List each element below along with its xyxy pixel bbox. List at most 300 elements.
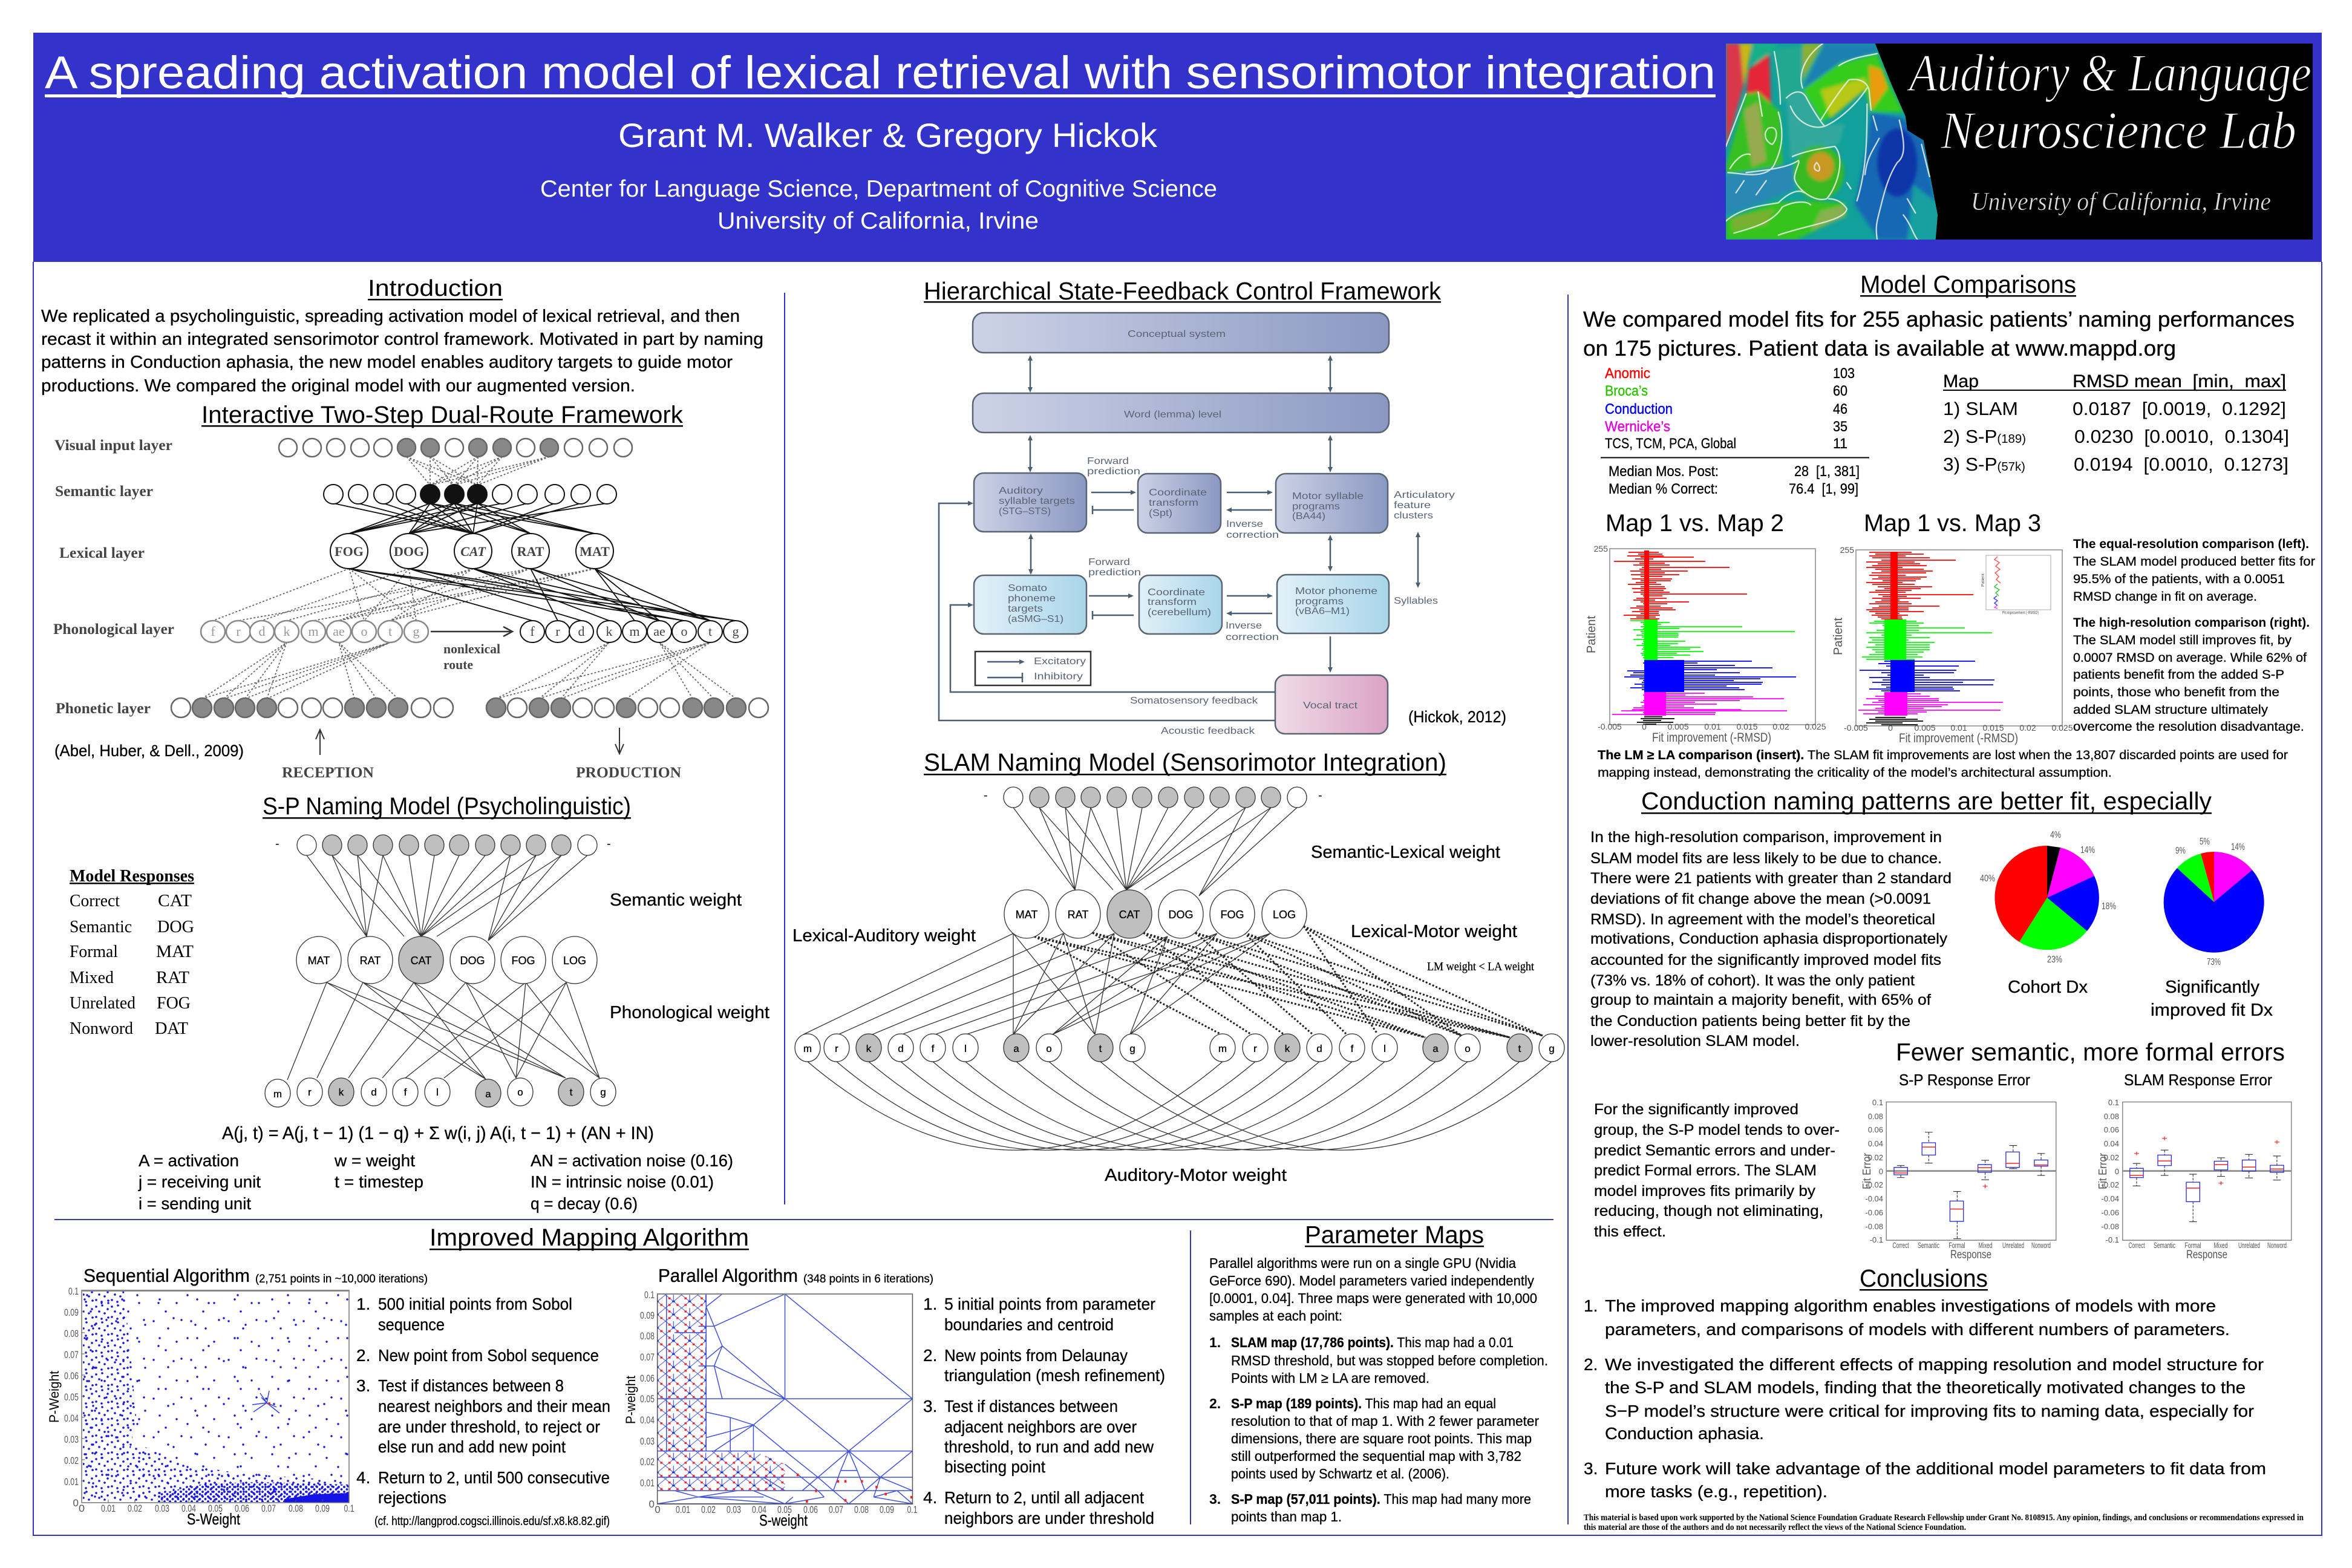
scatter plot: sequential map: 0.05 (64, 1391, 79, 1403)
table: model responses: RAT (156, 969, 189, 987)
box plot: S-P response error: Semantic (1918, 1241, 1939, 1250)
bar chart: map 1 vs map 3: 255 (1840, 545, 1854, 555)
label: semantic weight: Semantic weight (610, 890, 742, 910)
scatter plot: sequential map: 0.08 (289, 1503, 303, 1514)
conclusions list: The improved mapping algorithm enables investigations of models with more (1605, 1296, 2216, 1315)
conduction text: In the high-resolution comparison, improvement in (1590, 829, 1942, 846)
diagram: state-feedback boxes: Motor phoneme (1295, 586, 1377, 596)
subheading: sequential algorithm: Sequential Algorithm (83, 1265, 250, 1286)
equation legend: i = sending unit (139, 1194, 251, 1213)
box plot: SLAM response error: 0.1 (2108, 1098, 2119, 1107)
bar chart: map 1 vs map 3: -0.005 (1844, 723, 1868, 733)
table: model responses: DOG (157, 918, 194, 936)
parallel algorithm steps: triangulation (mesh refinement) (944, 1366, 1165, 1385)
bar chart: map 1 vs map 3: 0.025 (2051, 723, 2073, 733)
mesh plot: parallel map: 0.08 (854, 1504, 869, 1515)
conclusions list: more tasks (e.g., repetition). (1605, 1482, 1828, 1501)
pie chart: significantly improved fit Dx: improved fit Dx (2151, 1001, 2273, 1020)
diagram: state-feedback boxes: correction (1226, 530, 1279, 540)
pie chart: significantly improved fit Dx (2151, 837, 2273, 1020)
comparison notes: The SLAM model produced better fits for (2073, 555, 2315, 569)
conclusions list: the S-P and SLAM models, finding that the theoretically motivated changes to the (1605, 1378, 2246, 1397)
diagram: S-P network: DOG (460, 955, 485, 967)
diagram: S-P network: l (436, 1086, 439, 1098)
diagram: SLAM network: m (803, 1043, 812, 1054)
diagram: SLAM network: k (866, 1043, 872, 1054)
sequential algorithm steps (356, 1295, 610, 1528)
heading: improved mapping algorithm: Improved Mapping Algorithm (430, 1224, 749, 1251)
parameter maps list: resolution to that of map 1. With 2 fewer parameter (1231, 1413, 1539, 1429)
diagram: state-feedback boxes: Inverse (1226, 621, 1262, 631)
diagram: dual-route network: ae (333, 624, 345, 639)
mesh plot: parallel map: 0.02 (640, 1456, 655, 1468)
table: map RMSD: 0.0230 [0.0010, 0.1304] (2074, 426, 2289, 447)
layer labels: Semantic layer (55, 483, 153, 500)
diagram: SLAM network: m (1218, 1043, 1227, 1054)
parallel algorithm steps: threshold, to run and add new (944, 1437, 1154, 1456)
parallel algorithm steps: neighbors are under threshold (944, 1509, 1154, 1527)
diagram: dual-route network: MAT (580, 544, 610, 559)
layer labels: Phonetic layer (56, 701, 151, 717)
box plot: S-P response error: Nonword (2031, 1241, 2051, 1250)
bar chart: map 1 vs map 2: 0.025 (1805, 722, 1826, 731)
equation legend: q = decay (0.6) (531, 1194, 638, 1213)
pie chart: significantly improved fit Dx: Significantly (2165, 978, 2259, 997)
diagram: dual-route network: k (283, 624, 290, 639)
parameter maps list: SLAM map (17,786 points). This map had a 0.01 (1231, 1334, 1514, 1350)
diagram: S-P network (265, 835, 616, 1107)
diagram: state-feedback boxes: (cerebellum) (1148, 607, 1211, 618)
response error text (1594, 1101, 1840, 1240)
parameter maps list: 1. (1209, 1334, 1221, 1350)
box plot: S-P response error: 0.08 (1868, 1112, 1883, 1121)
mesh plot: parallel map: 0.04 (640, 1414, 655, 1426)
parallel algorithm steps: New points from Delaunay (944, 1346, 1128, 1365)
scatter plot: sequential map: P-Weight (47, 1371, 62, 1423)
scatter plot: sequential map: 0.07 (64, 1349, 79, 1361)
diagram: SLAM network: r (1253, 1043, 1257, 1054)
diagram: state-feedback boxes: syllable targets (999, 496, 1075, 506)
panel: introduction (41, 276, 763, 396)
diagram: state-feedback boxes: Vocal tract (1303, 701, 1358, 711)
box plot: S-P response error: 0.02 (1868, 1153, 1883, 1162)
box plot: SLAM response error: -0.04 (2101, 1194, 2119, 1203)
diagram: state-feedback boxes: Word (lemma) level (1124, 410, 1221, 420)
bar chart: map 1 vs map 3: 0.02 (2019, 723, 2036, 733)
model comparison intro: We compared model fits for 255 aphasic patients’ naming performances (1583, 307, 2295, 332)
layer labels (53, 437, 174, 717)
mesh plot: parallel map: 0.1 (907, 1504, 917, 1515)
bar chart: map 1 vs map 2: 255 (1594, 544, 1608, 554)
diagram: dual-route network: o (681, 624, 687, 639)
bar chart: map 1 vs map 3: Patient (1832, 618, 1845, 655)
layer labels: Lexical layer (59, 545, 145, 561)
mesh plot: parallel map: 0 (649, 1498, 655, 1510)
mesh plot: parallel map: 0.08 (640, 1330, 655, 1342)
arrow: reception (316, 730, 324, 755)
table: patient cohort: 103 (1833, 365, 1855, 382)
diagram: dual-route network: d (259, 624, 265, 639)
mesh plot: parallel map: 0.07 (829, 1504, 843, 1515)
diagram: S-P network: RAT (360, 955, 381, 967)
sequential algorithm steps: 1. (356, 1295, 370, 1313)
table: patient cohort: 11 (1833, 436, 1847, 452)
table: map RMSD: 1) SLAM (1943, 398, 2018, 419)
parallel algorithm steps: 2. (923, 1346, 937, 1365)
lab logo: University of California, Irvine (1971, 188, 2271, 216)
diagram: SLAM network: t (1518, 1043, 1521, 1054)
sequential algorithm steps: else run and add new point (378, 1437, 566, 1456)
scatter plot: sequential map: 0.09 (315, 1503, 330, 1514)
diagram: SLAM network: o (1046, 1043, 1052, 1054)
box plot: S-P response error: -0.02 (1865, 1180, 1883, 1189)
box plot: SLAM response error: Semantic (2154, 1241, 2175, 1250)
equation legend: IN = intrinsic noise (0.01) (531, 1172, 714, 1191)
scatter plot: sequential map: 0.1 (344, 1503, 354, 1514)
box plot: SLAM response error: Response (2186, 1249, 2227, 1261)
pie chart: cohort Dx: Cohort Dx (2008, 978, 2088, 997)
bar chart: map 1 vs map 3: Fit improvement (-RMSD) (1899, 731, 2018, 745)
conduction text: deviations of fit change above the mean (>0.0091 (1590, 890, 1931, 907)
label: nonlexical route: route (443, 657, 473, 672)
equation legend: w = weight (334, 1151, 415, 1170)
comparison notes: The equal-resolution comparison (left). (2073, 537, 2309, 551)
introduction text: recast it within an integrated sensorimotor control framework. Motivated in part by naming (41, 330, 763, 349)
table: patient cohort: 28 [1, 381] (1794, 463, 1860, 480)
bar chart: map 1 vs map 3: 0.01 (1950, 723, 1967, 733)
parameter maps list: dimensions, there are square root points. This map (1231, 1431, 1532, 1446)
scatter plot: sequential map: 0.09 (64, 1307, 79, 1318)
diagram: S-P network: - (607, 837, 611, 851)
box plot: SLAM response error: Correct (2128, 1241, 2145, 1250)
scatter plot: sequential map: 0.02 (64, 1455, 79, 1466)
scatter plot: sequential map: 0.05 (208, 1503, 223, 1514)
box plot: S-P response error: Correct (1892, 1241, 1909, 1250)
panel: interactive two-step dual-route framework (53, 402, 768, 781)
citation: (Hickok, 2012) (1408, 708, 1506, 726)
table: patient cohort: Median % Correct: (1609, 481, 1718, 497)
diagram: dual-route network: f (530, 624, 535, 639)
subheading: map 1 vs map 2: Map 1 vs. Map 2 (1606, 510, 1784, 537)
diagram: state-feedback boxes: prediction (1087, 466, 1140, 477)
diagram: state-feedback boxes: Somatosensory feedback (1130, 696, 1258, 706)
parameter maps list: RMSD threshold, but was stopped before completion. (1231, 1353, 1548, 1368)
diagram: state-feedback boxes: Forward (1088, 557, 1130, 567)
table: patient cohort (1601, 365, 1869, 497)
heading: conclusions: Conclusions (1860, 1264, 1988, 1292)
model comparison intro (1583, 307, 2295, 361)
mesh plot: parallel map: 0.09 (640, 1310, 655, 1321)
mesh plot: parallel map: 0.03 (727, 1504, 741, 1515)
diagram: SLAM network: g (1129, 1043, 1135, 1054)
conduction text: motivations, Conduction aphasia disproportionately (1590, 930, 1948, 947)
parallel algorithm steps (923, 1295, 1165, 1527)
parallel algorithm steps: Test if distances between (944, 1397, 1118, 1416)
diagram: dual-route network: t (708, 624, 712, 639)
diagram: SLAM network: t (1099, 1043, 1102, 1054)
sequential algorithm steps: 3. (356, 1376, 370, 1395)
table: patient cohort: 60 (1833, 383, 1847, 399)
diagram: S-P network: CAT (411, 955, 431, 967)
subheading: SLAM response error: SLAM Response Error (2124, 1071, 2272, 1089)
diagram: S-P network: - (275, 837, 279, 851)
equation legend: t = timestep (335, 1172, 423, 1191)
response error text: For the significantly improved (1594, 1101, 1798, 1118)
authors: Grant M. Walker & Gregory Hickok (618, 116, 1158, 154)
conclusions list (1584, 1296, 2266, 1501)
conclusions list: 1. (1584, 1296, 1598, 1315)
scatter plot: sequential map: 0.01 (64, 1476, 79, 1488)
box plot: S-P response error: 0.04 (1868, 1139, 1883, 1148)
comparison notes (2073, 537, 2315, 734)
parameter maps intro: GeForce 690). Model parameters varied independently (1209, 1273, 1534, 1289)
box plot: S-P response error: Fit Error (1861, 1153, 1873, 1189)
mesh plot: parallel map: P-weight (623, 1376, 638, 1424)
citation: (Abel, Huber, & Dell., 2009) (54, 742, 244, 760)
table: map RMSD: 0.0194 [0.0010, 0.1273] (2074, 454, 2288, 475)
diagram: SLAM network: d (1316, 1043, 1322, 1054)
sequential algorithm steps: rejections (378, 1488, 446, 1507)
sequential algorithm steps: sequence (378, 1315, 445, 1334)
panel: conclusions (1584, 1264, 2304, 1532)
sequential algorithm steps: Return to 2, until 500 consecutive (378, 1468, 610, 1487)
table: map RMSD (1943, 371, 2289, 475)
heading: conduction naming patterns: Conduction naming patterns are better fit, especially (1641, 787, 2212, 815)
subheading: sequential algorithm (83, 1265, 428, 1286)
funding note: this material are those of the authors and do not necessarily reflect the views of the National Science Foundation. (1584, 1523, 1966, 1532)
panel: S-P naming model (70, 793, 769, 1213)
conclusions list: Future work will take advantage of the additional model parameters to fit data from (1605, 1459, 2266, 1478)
table: patient cohort: 35 (1833, 419, 1847, 435)
bar chart: map 1 vs map 3: 0 (1888, 723, 1893, 733)
box plot: S-P response error: Response (1950, 1249, 1991, 1261)
table: model responses (70, 867, 194, 1038)
bar chart: map 1 vs map 2: Fit improvement (-RMSD) (1652, 731, 1771, 745)
sequential algorithm steps: (cf. http://langprod.cogsci.illinois.edu/sf.x8.k8.82.gif) (374, 1515, 610, 1528)
diagram: S-P network: k (339, 1086, 344, 1098)
bar chart: map 1 vs map 3: 0.015 (1982, 723, 2004, 733)
diagram: state-feedback boxes: Inverse (1226, 519, 1263, 529)
table: map RMSD: 3) S-P(57k) (1943, 454, 2025, 475)
response error text: group, the S-P model tends to over- (1594, 1122, 1840, 1138)
diagram: S-P network: o (517, 1086, 523, 1098)
layer labels: Visual input layer (54, 437, 172, 454)
introduction text: patterns in Conduction aphasia, the new model enables auditory targets to guide motor (41, 353, 733, 372)
parallel algorithm steps: adjacent neighbors are over (944, 1417, 1137, 1436)
panel: SLAM naming model (792, 748, 1564, 1185)
equation legend: j = receiving unit (138, 1172, 261, 1191)
box plot: SLAM response error: 0.04 (2104, 1139, 2119, 1148)
table: model responses: CAT (158, 892, 192, 910)
introduction text (41, 307, 763, 396)
box plot: S-P response error: 0 (1879, 1167, 1883, 1176)
lab logo (1726, 44, 2313, 240)
diagram: SLAM network: RAT (1068, 909, 1088, 921)
parameter maps list: S-P map (57,011 points). This map had many more (1231, 1491, 1531, 1507)
panel: improved mapping algorithm (47, 1224, 1165, 1529)
conclusions list: 2. (1584, 1355, 1598, 1374)
box plot: SLAM response error: -0.08 (2101, 1222, 2119, 1231)
conduction text: SLAM model fits are less likely to be due to chance. (1590, 850, 1942, 867)
heading: SLAM naming model: SLAM Naming Model (Sensorimotor Integration) (924, 748, 1446, 776)
bar chart: map 1 vs map 2: 0 (1642, 722, 1647, 731)
box plot: SLAM response error: Formal (2185, 1241, 2201, 1250)
diagram: state-feedback boxes: (aSMG–S1) (1008, 614, 1063, 624)
diagram: SLAM network: a (1013, 1043, 1019, 1054)
diagram: state-feedback boxes: Somato (1008, 583, 1047, 593)
response error text: predict Formal errors. The SLAM (1594, 1162, 1817, 1179)
diagram: state-feedback boxes: correction (1226, 632, 1279, 642)
pie chart: cohort Dx: 23% (2047, 955, 2062, 965)
box plot: SLAM response error: 0.02 (2104, 1153, 2119, 1162)
scatter plot: sequential map: 0.04 (64, 1413, 79, 1424)
equation legend: A = activation (139, 1151, 239, 1170)
comparison caption: mapping instead, demonstrating the criticality of the model’s architectural assumption. (1598, 766, 2112, 780)
model comparison intro: on 175 pictures. Patient data is available at www.mappd.org (1583, 336, 2176, 361)
heading: parameter maps: Parameter Maps (1305, 1221, 1484, 1249)
labels: reception and production: RECEPTION (282, 765, 374, 781)
sequential algorithm steps: are under threshold, to reject or (378, 1417, 600, 1436)
diagram: dual-route network: m (308, 624, 319, 639)
title: A spreading activation model of lexical retrieval with sensorimotor integration (45, 47, 1716, 99)
introduction text: We replicated a psycholinguistic, spreading activation model of lexical retrieval, and then (41, 307, 740, 326)
diagram: state-feedback boxes: phoneme (1008, 593, 1056, 604)
diagram: state-feedback boxes: Motor syllable (1292, 491, 1364, 501)
pie chart: cohort Dx (1980, 830, 2116, 997)
conclusions list: parameters, and comparisons of models with different numbers of parameters. (1605, 1320, 2230, 1339)
parameter maps list: points used by Schwartz et al. (2006). (1231, 1466, 1449, 1481)
diagram: S-P network: g (600, 1086, 606, 1098)
panel: parameter maps (1209, 1221, 1548, 1524)
box plot: SLAM response error: -0.1 (2106, 1235, 2119, 1244)
conduction text: lower-resolution SLAM model. (1590, 1033, 1800, 1050)
box plot: S-P response error: -0.08 (1865, 1222, 1883, 1231)
box plot: S-P response error: Formal (1949, 1241, 1965, 1250)
response error text: this effect. (1594, 1223, 1666, 1240)
mesh plot: parallel map: 0.02 (701, 1504, 716, 1515)
box plot: SLAM response error: Mixed (2214, 1241, 2227, 1250)
box plot: S-P response error (1861, 1098, 2056, 1261)
label: semantic-lexical weight: Semantic-Lexical weight (1311, 843, 1500, 862)
diagram: S-P network: d (371, 1086, 377, 1098)
comparison notes: 0.0007 RMSD on average. While 62% of (2073, 651, 2307, 665)
parallel algorithm steps: Return to 2, until all adjacent (944, 1488, 1144, 1507)
label: phonological weight: Phonological weight (610, 1003, 769, 1022)
diagram: dual-route network: k (606, 624, 612, 639)
mesh plot: parallel map: 0.05 (777, 1504, 792, 1515)
box plot: SLAM response error: Unrelated (2238, 1241, 2260, 1250)
bar chart: map 1 vs map 3: 0.005 (1914, 723, 1936, 733)
scatter plot: sequential map: 0.02 (128, 1503, 142, 1514)
parameter maps list: Points with LM ≥ LA are removed. (1231, 1370, 1429, 1386)
diagram: state-feedback boxes: Syllables (1394, 596, 1438, 606)
pie chart: significantly improved fit Dx: 14% (2231, 842, 2245, 852)
diagram: dual-route network: t (388, 624, 392, 639)
diagram: dual-route network: d (578, 624, 584, 639)
subheading: parallel algorithm: (348 points in 6 iterations) (803, 1273, 933, 1285)
table: map RMSD: 0.0187 [0.0019, 0.1292] (2073, 398, 2286, 419)
bar chart: map 1 vs map 2 (1585, 544, 1826, 745)
bar chart: map 1 vs map 2: 0.015 (1736, 722, 1758, 731)
parameter maps list: S-P map (189 points). This map had an equal (1231, 1396, 1496, 1411)
diagram: dual-route network: f (211, 624, 215, 639)
parameter maps list: points than map 1. (1231, 1509, 1342, 1524)
conclusions list: S−P model’s structure were critical for improving fits to naming data, especially for (1605, 1402, 2254, 1420)
scatter plot: sequential map: 0.03 (64, 1434, 79, 1445)
conclusions list: Conduction aphasia. (1605, 1424, 1764, 1443)
diagram: dual-route network: m (629, 624, 640, 639)
conduction text: (73% vs. 18% of cohort). It was the only patient (1590, 972, 1915, 989)
diagram: SLAM network: o (1465, 1043, 1471, 1054)
comparison notes: patients benefit from the added S-P (2073, 668, 2284, 682)
diagram: S-P network: a (485, 1088, 491, 1100)
box plot: SLAM response error: 0.06 (2104, 1125, 2119, 1134)
heading: fewer semantic errors: Fewer semantic, more formal errors (1896, 1038, 2285, 1066)
sequential algorithm steps: 4. (356, 1468, 370, 1487)
diagram: state-feedback boxes: targets (1008, 604, 1043, 614)
diagram: S-P network: LOG (563, 955, 586, 967)
diagram: SLAM network: l (964, 1043, 967, 1054)
diagram: state-feedback boxes: Coordinate (1149, 488, 1207, 498)
diagram: dual-route network: g (413, 624, 420, 639)
pie chart: significantly improved fit Dx: 5% (2200, 837, 2210, 847)
box plot: S-P response error: 0.1 (1872, 1098, 1883, 1107)
heading: dual-route framework: Interactive Two-Step Dual-Route Framework (201, 402, 684, 428)
parallel algorithm steps: 1. (923, 1295, 937, 1313)
table: model responses: Nonword (70, 1019, 133, 1038)
diagram: dual-route network: DOG (394, 544, 424, 559)
introduction text: productions. We compared the original model with our augmented version. (41, 376, 635, 396)
diagram: state-feedback boxes: Conceptual system (1128, 329, 1226, 339)
scatter plot: sequential map: 0.08 (64, 1328, 79, 1339)
comparison notes: The high-resolution comparison (right). (2073, 616, 2310, 630)
table: model responses: Model Responses (70, 867, 194, 886)
diagram: S-P network: m (273, 1088, 282, 1100)
diagram: dual-route network: FOG (335, 544, 364, 559)
label: LM weight less than LA weight: LM weight < LA weight (1427, 960, 1534, 973)
parallel algorithm steps: 5 initial points from parameter (944, 1295, 1155, 1313)
mesh plot: parallel map: 0.06 (640, 1373, 655, 1384)
table: model responses: DAT (155, 1019, 188, 1038)
conduction text: the Conduction patients being better fit by the (1590, 1013, 1910, 1030)
box plot: SLAM response error: Fit Error (2097, 1153, 2109, 1189)
table: model responses: Mixed (70, 969, 114, 987)
diagram: state-feedback boxes: Auditory (999, 486, 1043, 496)
mesh plot: parallel map: 0.01 (676, 1504, 690, 1515)
scatter plot: sequential map: 0.07 (261, 1503, 276, 1514)
table: map RMSD: Map (1943, 371, 1979, 391)
mesh plot: parallel map: S-weight (759, 1511, 808, 1529)
pie chart: cohort Dx: 18% (2102, 901, 2116, 912)
diagram: state-feedback boxes: programs (1295, 596, 1344, 607)
response error text: reducing, though not eliminating, (1594, 1203, 1823, 1220)
parameter maps list: still outperformed the sequential map with 3,782 (1231, 1448, 1521, 1464)
box plot: S-P response error: Unrelated (2002, 1241, 2024, 1250)
diagram: SLAM network: f (932, 1043, 935, 1054)
diagram: SLAM network: f (1351, 1043, 1354, 1054)
diagram: S-P network: r (308, 1086, 312, 1098)
heading: introduction: Introduction (368, 276, 503, 301)
diagram: SLAM network: MAT (1016, 909, 1037, 921)
equation legend (138, 1151, 733, 1213)
conduction text (1590, 829, 1952, 1050)
diagram: SLAM network: FOG (1221, 909, 1244, 921)
parameter maps list: 3. (1209, 1491, 1221, 1507)
diagram: S-P network: f (404, 1086, 407, 1098)
panel: hierarchical state-feedback control framework (924, 277, 1506, 736)
mesh plot: parallel map: 0.01 (640, 1477, 655, 1489)
box plot: S-P response error: Mixed (1978, 1241, 1993, 1250)
